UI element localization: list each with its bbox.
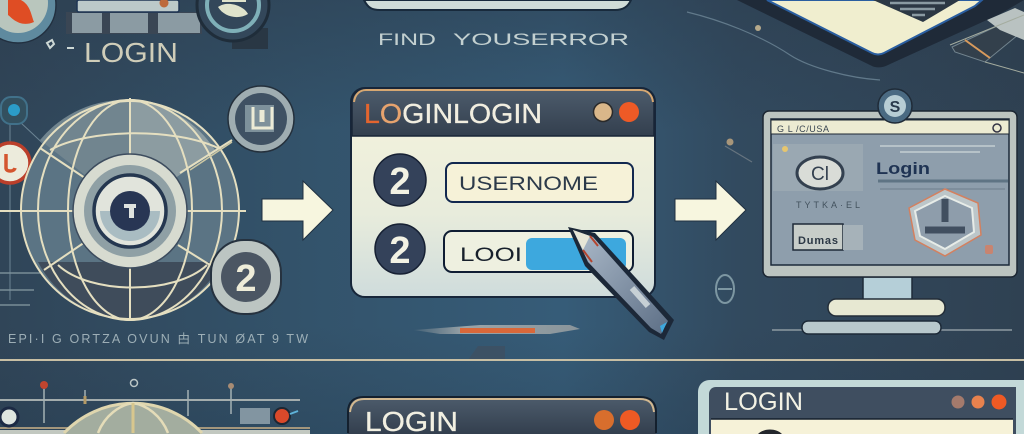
monitor login label: Login	[876, 159, 930, 178]
window title bar	[352, 89, 654, 136]
step badge: number 2: 2	[235, 258, 257, 300]
monitor stand	[828, 277, 945, 316]
panel: bottom-centre login window	[348, 397, 656, 434]
step 2 login badge	[375, 224, 425, 274]
browser bar: G L /C/USA	[777, 124, 829, 134]
username field: USERNOME	[459, 174, 598, 195]
login field with button	[444, 231, 633, 272]
arrow 1	[262, 181, 333, 240]
top-right globe badge icon	[190, 86, 294, 170]
shield icon	[909, 189, 993, 256]
username field	[446, 163, 633, 202]
panel: desktop monitor	[763, 89, 1017, 316]
left side icons and connectors	[0, 97, 50, 305]
left site column: Cl	[811, 164, 829, 185]
panel: bottom-right login window	[698, 380, 1024, 434]
left site column: TYTKA·EL	[796, 200, 860, 210]
icon: pen cursor	[568, 227, 674, 340]
top-left cropped login illustration	[0, 0, 269, 49]
panel: bottom-right login window: LOGIN	[724, 388, 803, 416]
divider line	[0, 359, 1024, 361]
heading: top-left login: LOGIN	[84, 37, 178, 68]
globe icon	[0, 98, 246, 320]
step badge: number 2	[211, 240, 281, 314]
browser bar	[771, 120, 1009, 134]
step 2 username badge	[374, 154, 426, 206]
window title bar: LOGINLOGIN	[364, 98, 542, 129]
heading: find your	[378, 30, 629, 49]
top-right laptop	[687, 0, 1024, 80]
webcam	[878, 89, 912, 123]
bottom-left login illustration	[0, 380, 310, 434]
heading: find your: YOUSERROR	[453, 30, 629, 49]
monitor desk pen	[772, 321, 1012, 334]
step 2 login badge: 2	[389, 230, 411, 272]
arrow 2	[675, 181, 746, 240]
left site column	[773, 144, 863, 250]
left site column: Dumas	[798, 235, 838, 247]
decorative pen under window	[414, 325, 580, 360]
heading: find your: FIND	[378, 30, 436, 49]
top-centre cropped panel	[364, 0, 631, 10]
webcam: S	[890, 99, 901, 116]
step 2 username badge: 2	[389, 161, 411, 203]
login field with button: LOOI	[460, 245, 522, 266]
panel: login window	[351, 88, 655, 297]
caption under globe: EPI·I G ORTZA OVUN 甴 TUN ØAT 9 TW	[8, 332, 308, 346]
small side icons	[716, 138, 752, 303]
